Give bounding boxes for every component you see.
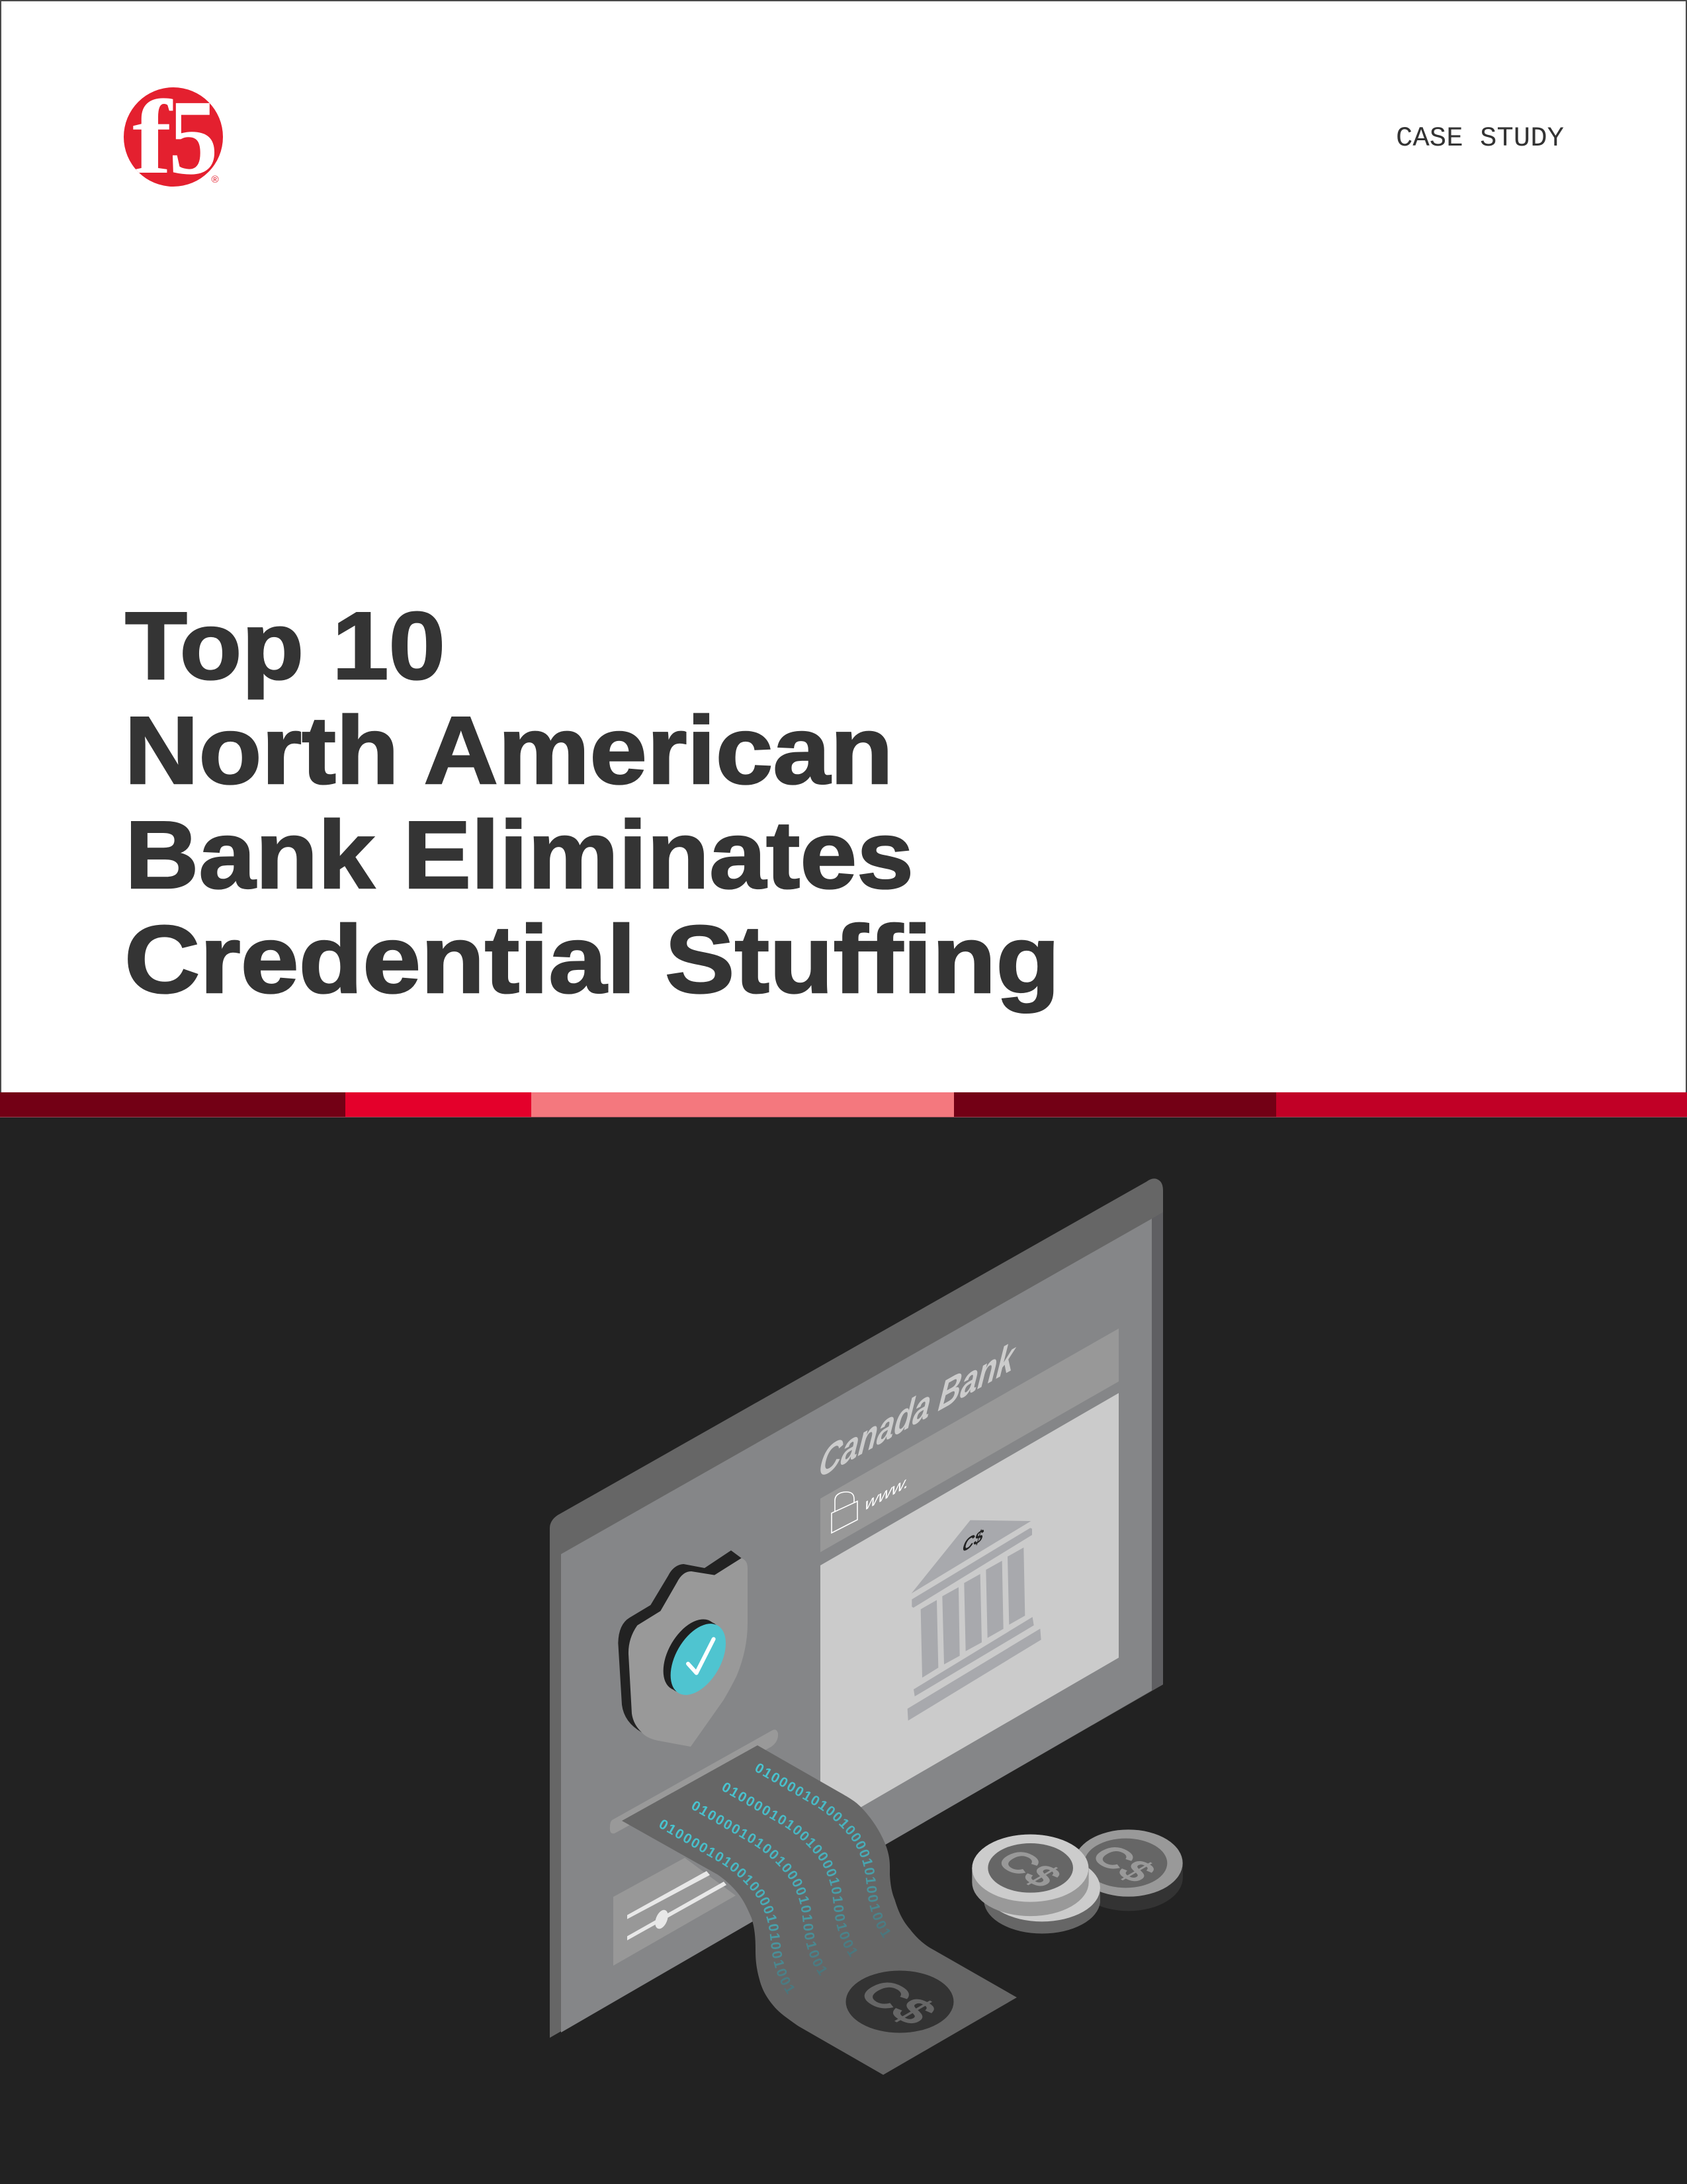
icon: coins (972, 1829, 1183, 1934)
heading: Canada Bank: Canada Bank (814, 1330, 1021, 1489)
label: case study: CASE STUDY (1396, 122, 1564, 154)
logo: F5: 5 (169, 77, 218, 197)
title: Bank Eliminates (125, 801, 914, 908)
icon: padlock (832, 1492, 857, 1533)
browser page (820, 1393, 1119, 1831)
bill C$ medallion: C$ (845, 1972, 950, 2032)
top left coin: C$ (986, 1843, 1072, 1894)
panel: slider control (613, 1858, 736, 1966)
title: Top 10 (125, 592, 445, 699)
browser header band (820, 1329, 1119, 1552)
slot (610, 1729, 778, 1833)
colour band (0, 1092, 1687, 1117)
right coin (1074, 1829, 1183, 1911)
illustration: monitor with bank page (550, 1178, 1163, 2075)
right coin: C$ (1080, 1839, 1166, 1889)
binary rows: 0100001010010000101001001 (660, 1819, 795, 1994)
logo: F5: f (132, 79, 173, 196)
monitor face (561, 1219, 1152, 2032)
panel: white header area (1, 1, 1686, 1094)
title: North American (124, 697, 893, 804)
binary rows (660, 1764, 890, 1994)
lower left coin (984, 1855, 1100, 1934)
monitor right side (1152, 1212, 1163, 1690)
title: Credential Stuffing (124, 906, 1060, 1013)
title (124, 592, 1060, 1013)
text: www.: www. (861, 1471, 912, 1516)
icon: bank building: C$ (960, 1524, 986, 1557)
icon: shield with check (618, 1550, 748, 1747)
top left coin (972, 1835, 1089, 1916)
bill emerging from slot (622, 1745, 1017, 2075)
binary rows: 0100001010010000101001001 (756, 1764, 890, 1939)
icon: bank building (908, 1520, 1041, 1721)
binary rows: 0100001010010000101001001 (722, 1782, 857, 1957)
logo: F5: ® (211, 174, 219, 185)
monitor casing (550, 1178, 1163, 2038)
logo: F5 (124, 87, 223, 187)
binary rows: 0100001010010000101001001 (692, 1801, 827, 1976)
